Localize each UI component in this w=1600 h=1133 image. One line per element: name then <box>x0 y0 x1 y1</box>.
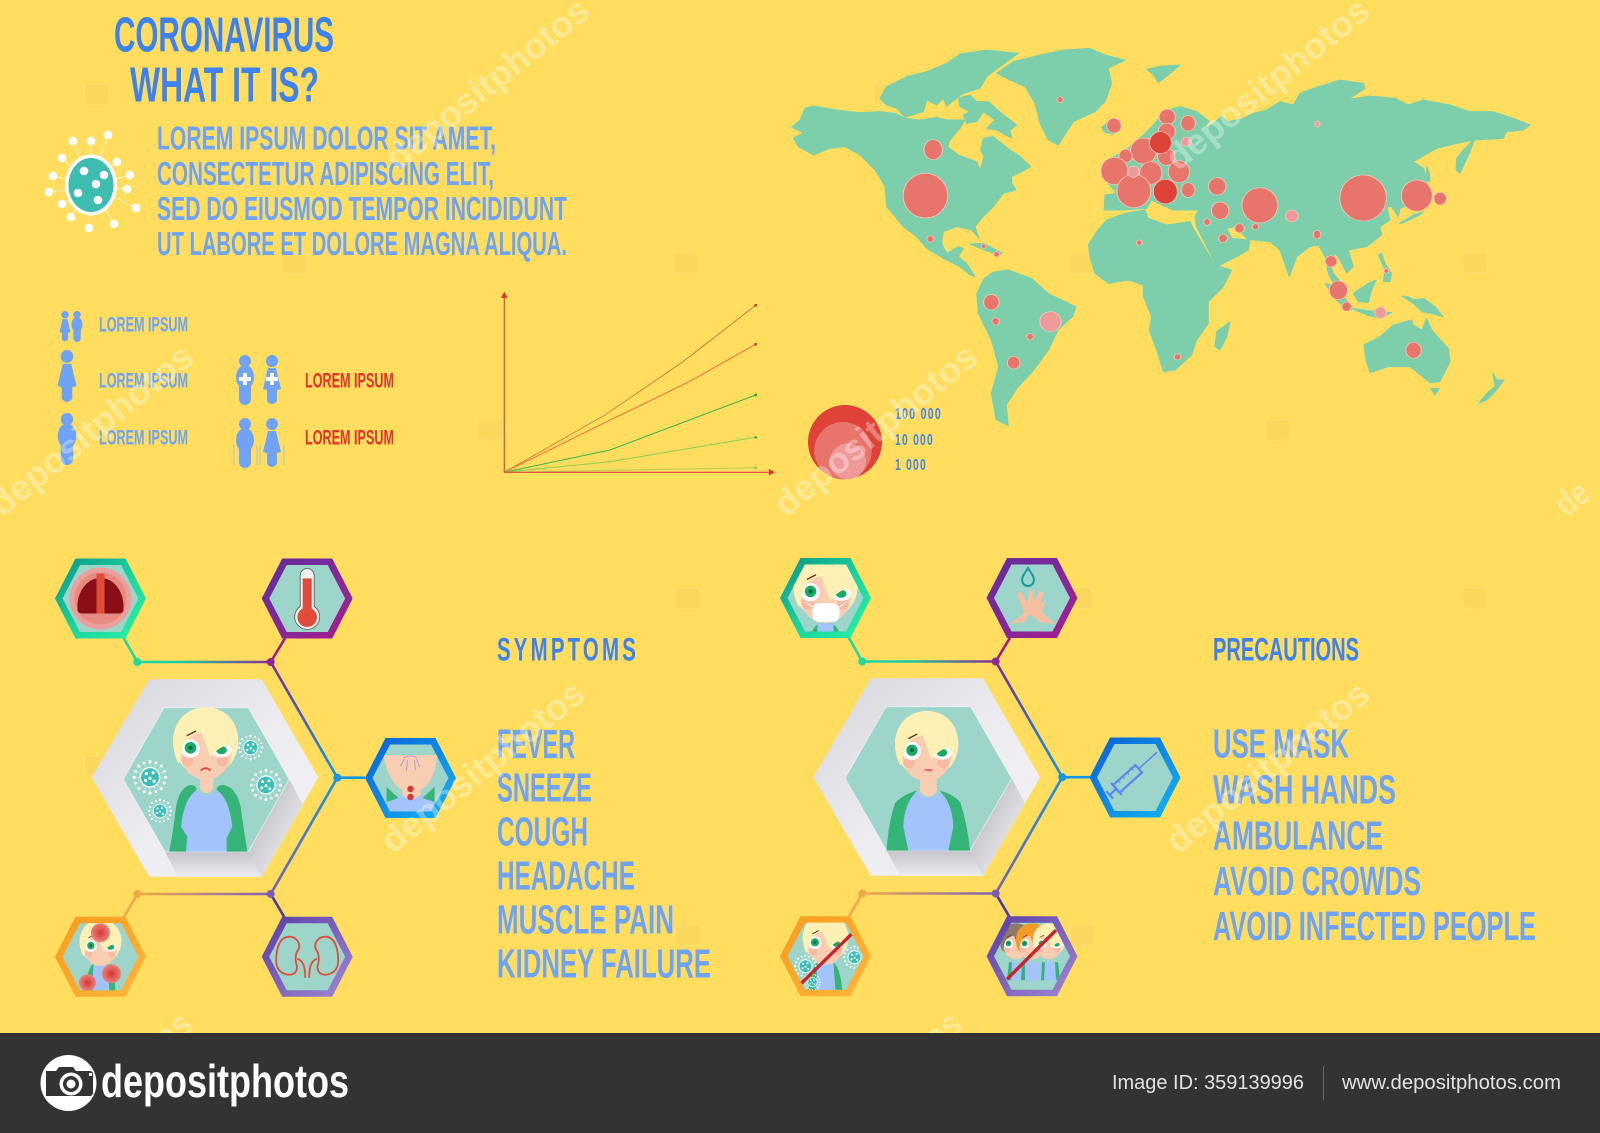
footer bar <box>0 1033 1600 1133</box>
intro paragraph: CONSECTETUR ADIPISCING ELIT, <box>157 155 494 192</box>
bubble size legend <box>808 405 942 479</box>
world map <box>792 48 1530 427</box>
people legend <box>57 311 394 468</box>
intro paragraph: UT LABORE ET DOLORE MAGNA ALIQUA. <box>157 225 567 262</box>
connector lines <box>123 637 365 918</box>
watermark text: depositphotos <box>1157 672 1377 861</box>
precautions text: USE MASK <box>1213 720 1349 766</box>
image id: Image ID: 359139996 <box>1112 1072 1304 1094</box>
central hexagon: sick person <box>92 679 318 877</box>
website: www.depositphotos.com <box>1341 1072 1561 1094</box>
panel: symptoms diagram <box>55 558 456 997</box>
symptoms text: FEVER <box>497 721 575 767</box>
title <box>114 9 334 113</box>
watermark text: depositphotos <box>765 335 985 524</box>
precautions text: AVOID CROWDS <box>1213 858 1421 904</box>
central hexagon: healthy person <box>813 678 1040 876</box>
intro paragraph: LOREM IPSUM DOLOR SIT AMET, <box>157 120 496 157</box>
watermark camera marks <box>85 84 1487 945</box>
americas, greenland, iceland <box>792 48 1180 277</box>
intro paragraph <box>157 120 567 262</box>
icon: washing hands <box>986 558 1078 638</box>
bubble size legend: 100 000 <box>895 406 942 423</box>
people legend labels <box>99 314 394 449</box>
icon: two small figures <box>59 311 83 342</box>
people legend labels: LOREM IPSUM <box>305 426 394 449</box>
precautions text: PRECAUTIONS <box>1213 632 1359 668</box>
icon: sore throat <box>365 738 456 818</box>
africa, australia, islands <box>1088 210 1504 403</box>
watermark text: os <box>144 1002 200 1058</box>
icon: depositphotos logo <box>40 1055 96 1111</box>
watermark text: os <box>914 1002 970 1058</box>
symptoms text: COUGH <box>497 809 588 855</box>
panel: precautions diagram <box>780 551 1180 996</box>
intro paragraph: SED DO EIUSMOD TEMPOR INCIDIDUNT <box>157 190 567 227</box>
title: CORONAVIRUS <box>114 9 334 63</box>
symptoms text: MUSCLE PAIN <box>497 896 674 942</box>
symptoms text: KIDNEY FAILURE <box>497 940 711 986</box>
precautions text <box>1213 632 1536 949</box>
people legend labels: LOREM IPSUM <box>305 370 394 393</box>
icon: lungs <box>55 558 146 638</box>
icon: figures with medical cross <box>236 355 281 405</box>
bubble size legend: 10 000 <box>895 432 934 449</box>
people legend labels: LOREM IPSUM <box>99 426 188 449</box>
icon: aching body <box>55 917 146 997</box>
icon: syringe <box>1090 738 1180 818</box>
precautions text: AMBULANCE <box>1213 812 1383 858</box>
icon: avoid infected person <box>780 914 871 996</box>
icon: avoid crowds <box>986 916 1078 996</box>
icon: coronavirus <box>45 131 140 232</box>
title: WHAT IT IS? <box>130 59 319 113</box>
symptoms text: SNEEZE <box>497 765 592 811</box>
logo wordmark: depositphotos <box>101 1055 349 1107</box>
icon: figures with side rails <box>234 418 284 468</box>
icon: face mask <box>780 551 871 638</box>
connector lines <box>848 637 1090 918</box>
outbreak bubbles <box>903 97 1446 369</box>
people legend labels: LOREM IPSUM <box>99 314 188 337</box>
symptoms text: HEADACHE <box>497 852 635 898</box>
symptoms text <box>497 632 711 986</box>
icon: kidneys <box>262 917 353 997</box>
bubble size legend: 1 000 <box>895 457 927 474</box>
line chart <box>501 292 775 476</box>
watermark text: depositphotos <box>372 672 592 861</box>
precautions text: WASH HANDS <box>1213 766 1396 812</box>
people legend labels: LOREM IPSUM <box>99 370 188 393</box>
eurasia <box>1103 80 1530 290</box>
symptoms text: SYMPTOMS <box>497 632 639 668</box>
icon: thermometer <box>262 558 353 638</box>
south america <box>976 269 1077 427</box>
